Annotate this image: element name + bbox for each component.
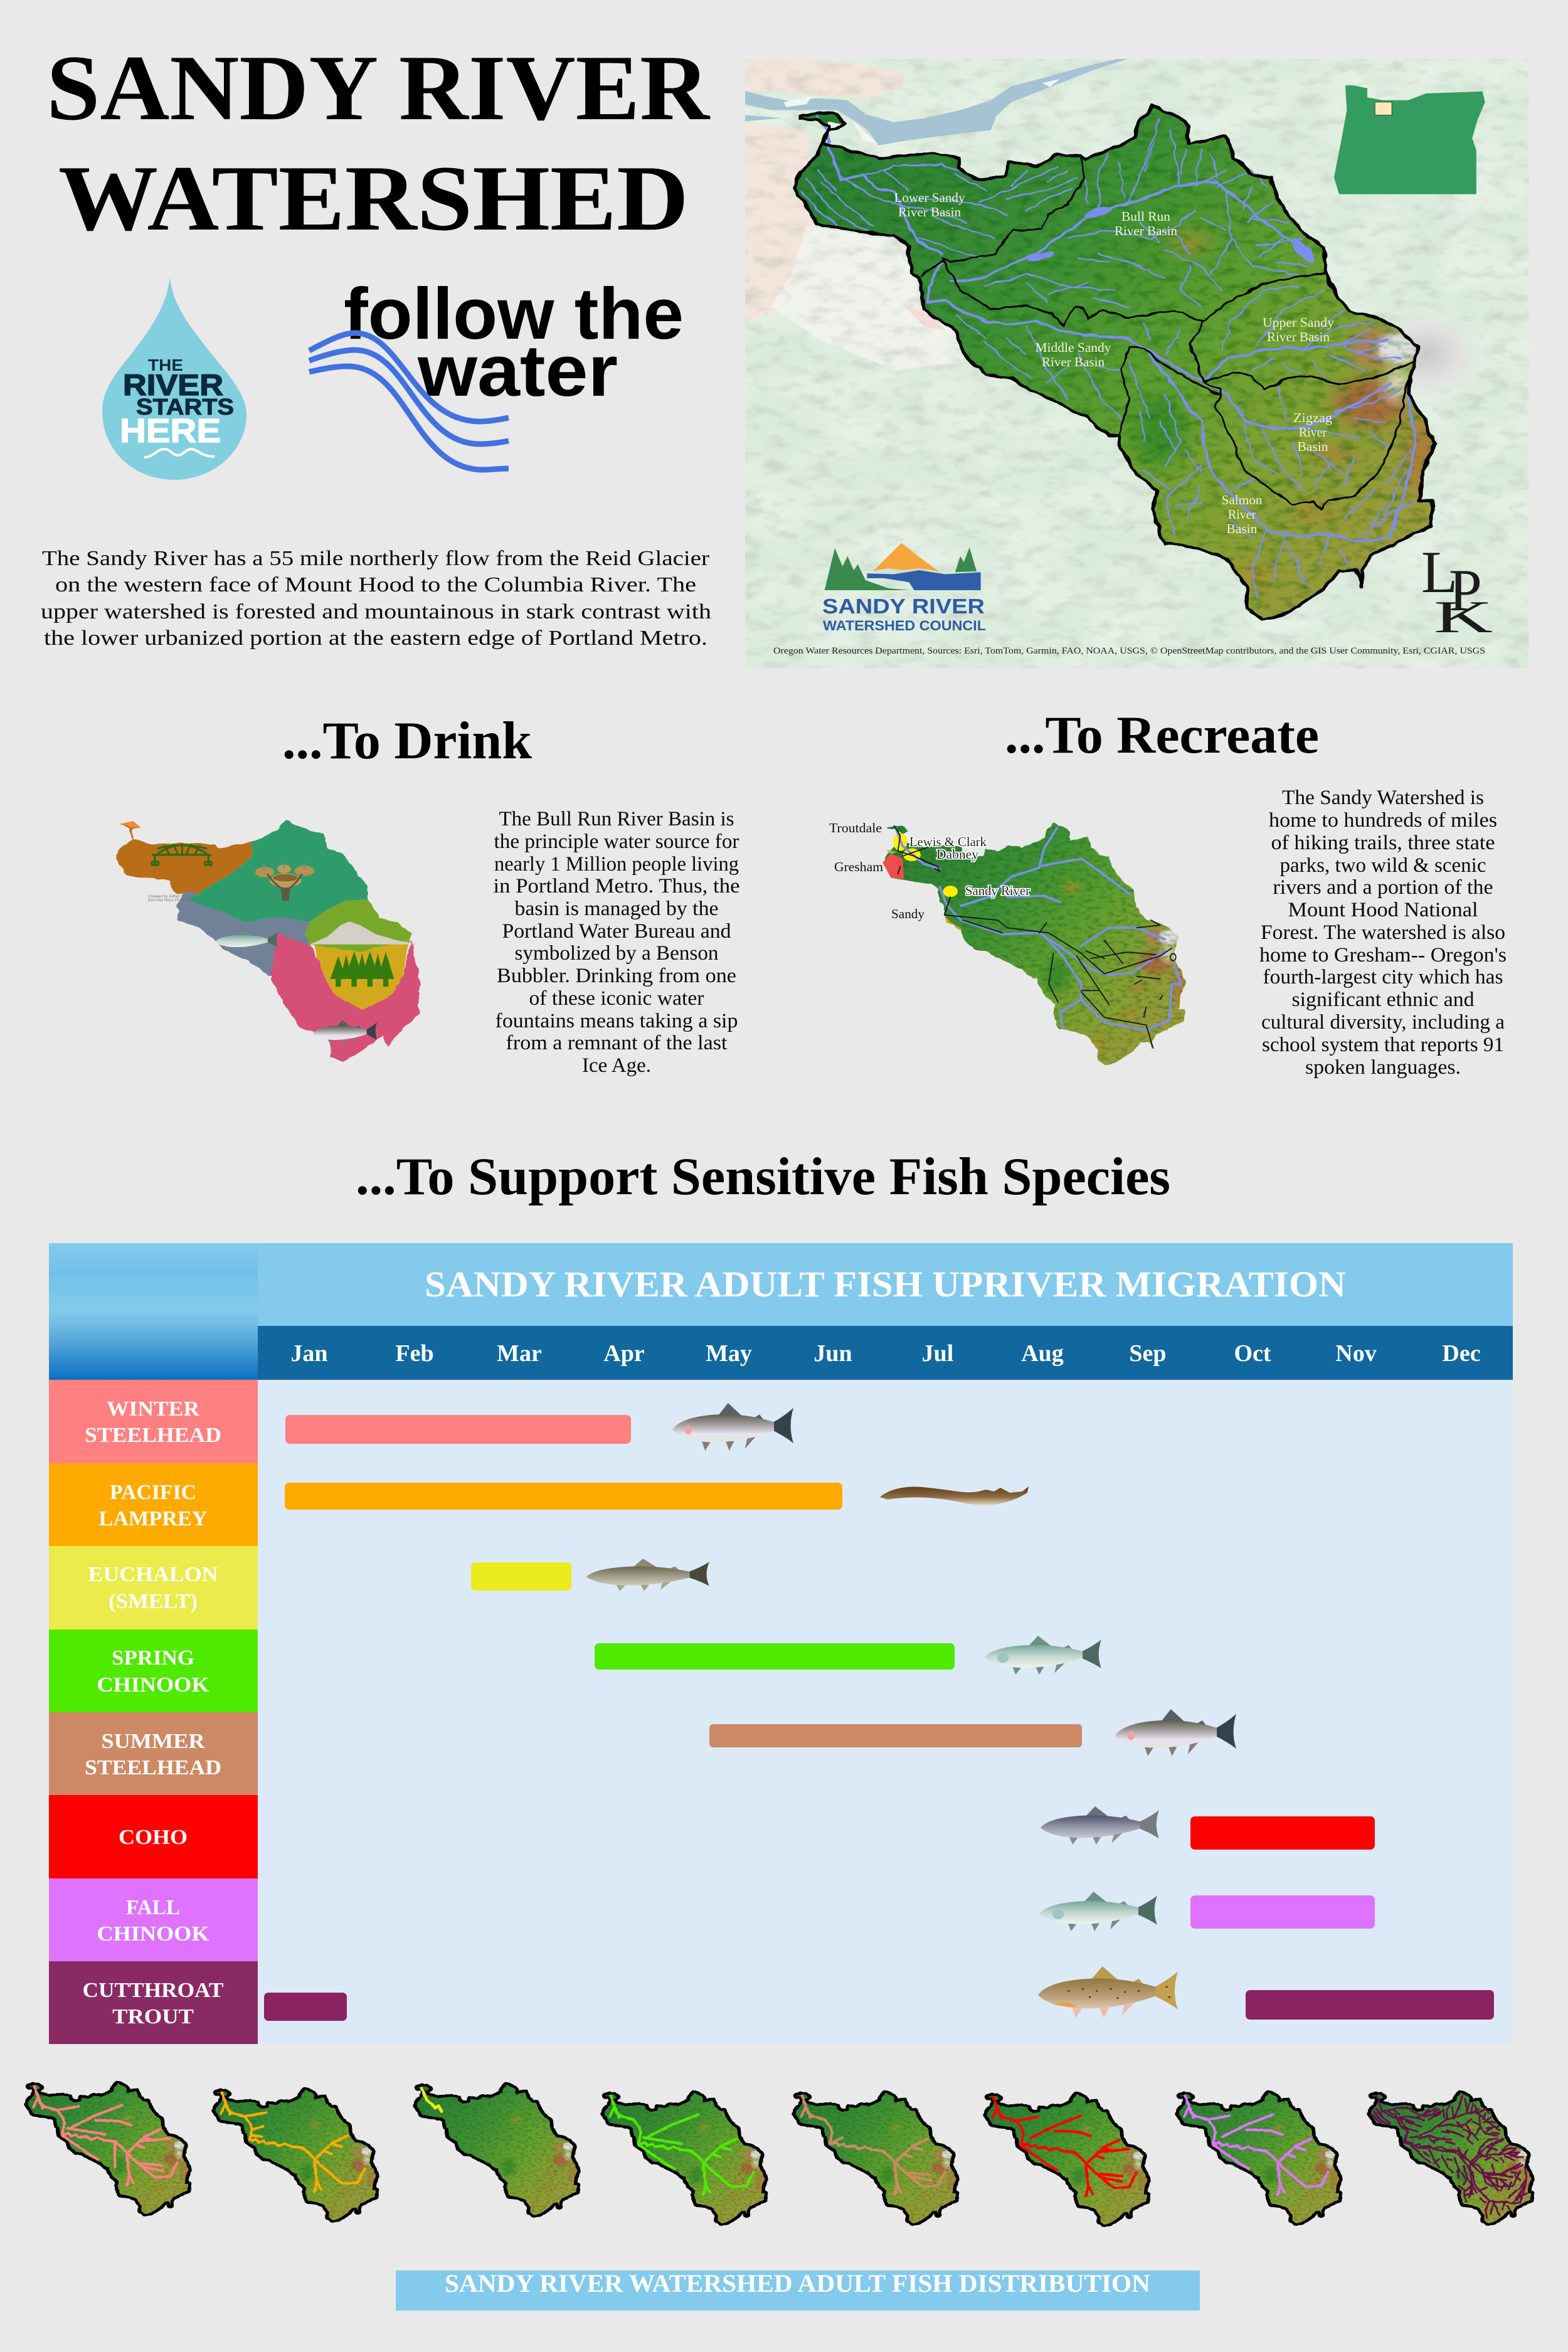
heading: to drink: ...To Drink: [282, 711, 532, 770]
icon: fir trees: [331, 951, 394, 987]
title: [46, 36, 710, 250]
icon: benson bubbler fountain: [255, 863, 314, 901]
icon: bridge: [152, 845, 211, 865]
row: cutthroat trout: [49, 1961, 1494, 2044]
basin labels: River: [1228, 507, 1256, 522]
drink paragraph: nearly 1 Million people living: [494, 853, 739, 876]
place labels: Sandy: [891, 906, 925, 921]
month band: Feb: [395, 1340, 434, 1367]
place labels: Gresham: [834, 859, 883, 874]
basin labels: River Basin: [1115, 223, 1177, 238]
logo: Sandy River Watershed Council: [822, 543, 986, 633]
caption: adult fish distribution: [396, 2269, 1200, 2311]
drink paragraph: [493, 808, 740, 1077]
recreate paragraph: cultural diversity, including a: [1261, 1011, 1505, 1034]
logo: LPK: K: [1434, 591, 1493, 642]
place labels: [829, 820, 1030, 921]
place labels: Lewis & Clark: [909, 834, 987, 849]
month band: Jul: [922, 1340, 953, 1367]
row: spring chinook: SPRING: [112, 1646, 194, 1670]
recreate paragraph: parks, two wild & scenic: [1279, 854, 1486, 877]
recreate paragraph: Forest. The watershed is also: [1261, 921, 1505, 944]
row: spring chinook: CHINOOK: [97, 1673, 209, 1697]
row: coho: [49, 1795, 1375, 1878]
map attribution: Oregon Water Resources Department, Sources: Esri, TomTom, Garmin, FAO, NOAA, USGS, © OpenStreetMap contributors, and the GIS User Community, Esri, CGIAR, USGS: [773, 646, 1485, 656]
intro paragraph: The Sandy River has a 55 mile northerly flow from the Reid Glacier: [42, 547, 710, 570]
drink paragraph: Ice Age.: [582, 1054, 651, 1077]
drink paragraph: Bubbler. Drinking from one: [497, 965, 736, 987]
panel: recreate map: [829, 820, 1189, 1066]
drink paragraph: symbolized by a Benson: [514, 942, 719, 965]
row: euchalon smelt: [49, 1546, 709, 1629]
noun project credit: [148, 894, 193, 903]
intro paragraph: the lower urbanized portion at the eastern edge of Portland Metro.: [44, 627, 707, 650]
panel: drink basin map: [116, 820, 420, 1062]
heading: to support sensitive fish species: ...To Support Sensitive Fish Species: [356, 1147, 1170, 1206]
logo: follow the water: [309, 273, 684, 470]
chart title band: SANDY RIVER ADULT FISH UPRIVER MIGRATION: [425, 1264, 1346, 1305]
distribution map: summer steelhead: [793, 2092, 958, 2224]
month band: Apr: [603, 1340, 645, 1367]
distribution map: cutthroat trout: [1369, 2092, 1533, 2224]
distribution map: coho: [985, 2093, 1149, 2225]
rivers, trails and parks: [882, 826, 1181, 1048]
drink paragraph: Portland Water Bureau and: [502, 920, 731, 943]
row: euchalon smelt: (SMELT): [109, 1590, 198, 1613]
logo: follow the water: water: [417, 330, 618, 411]
row: cutthroat trout: TROUT: [112, 2005, 194, 2028]
noun project credit: Created by Arthur Shlain: [148, 894, 193, 899]
recreate paragraph: school system that reports 91: [1262, 1034, 1504, 1056]
row: pacific lamprey: [49, 1463, 1029, 1546]
recreate paragraph: spoken languages.: [1305, 1056, 1461, 1079]
distribution map: pacific lamprey: [213, 2089, 378, 2221]
row: winter steelhead: STEELHEAD: [85, 1424, 221, 1447]
logo: Sandy River Watershed Council: SANDY RIVER: [822, 595, 985, 618]
panel: migration chart: [49, 1243, 1513, 2044]
corner gradient: [49, 1243, 258, 1380]
month band: Aug: [1021, 1340, 1064, 1367]
recreate paragraph: of hiking trails, three state: [1271, 832, 1495, 854]
caption: adult fish distribution: SANDY RIVER WATERSHED ADULT FISH DISTRIBUTION: [445, 2269, 1150, 2297]
intro paragraph: on the western face of Mount Hood to the Columbia River. The: [55, 573, 696, 596]
basin labels: Lower Sandy: [894, 190, 965, 205]
chart title band: [258, 1243, 1513, 1326]
recreate paragraph: home to hundreds of miles: [1269, 809, 1497, 832]
place labels: Dabney: [936, 847, 979, 862]
drink paragraph: fountains means taking a sip: [495, 1010, 738, 1032]
row: pacific lamprey: LAMPREY: [99, 1507, 207, 1530]
intro paragraph: upper watershed is forested and mountainous in stark contrast with: [41, 600, 711, 623]
basin labels: Zigzag: [1293, 410, 1333, 425]
month band: May: [706, 1340, 752, 1367]
basin labels: Upper Sandy: [1263, 315, 1335, 330]
icon: steelhead on drink map: [313, 1020, 377, 1044]
logo: LPK: [1421, 539, 1493, 642]
basin labels: River Basin: [1042, 354, 1104, 369]
logo: the river starts here drop: [102, 277, 246, 480]
row: euchalon smelt: EUCHALON: [88, 1563, 218, 1586]
basin labels: Salmon: [1222, 492, 1263, 507]
month band: Dec: [1442, 1340, 1481, 1367]
row: spring chinook: [49, 1629, 1101, 1712]
month band: Mar: [497, 1340, 542, 1367]
recreate paragraph: significant ethnic and: [1292, 988, 1475, 1011]
drink paragraph: The Bull Run River Basin is: [499, 808, 734, 830]
distribution map: winter steelhead: [26, 2082, 190, 2215]
month band: Jun: [813, 1340, 852, 1367]
basin labels: [894, 190, 1335, 536]
month band: [258, 1326, 1513, 1380]
row: summer steelhead: STEELHEAD: [85, 1756, 221, 1779]
basin labels: River Basin: [898, 204, 961, 220]
title: SANDY RIVER: [46, 36, 710, 140]
recreate paragraph: Mount Hood National: [1288, 899, 1478, 921]
row: cutthroat trout: CUTTHROAT: [83, 1979, 224, 2002]
recreate paragraph: The Sandy Watershed is: [1282, 787, 1484, 809]
month band: Nov: [1335, 1340, 1377, 1367]
heading: to recreate: ...To Recreate: [1005, 706, 1319, 765]
distribution map: fall chinook: [1177, 2092, 1341, 2224]
row: summer steelhead: [49, 1709, 1236, 1795]
row: coho: COHO: [119, 1826, 188, 1849]
chart body: [258, 1380, 1513, 2044]
logo: the river starts here drop: RIVER: [123, 368, 223, 401]
month band: Sep: [1129, 1340, 1167, 1367]
recreate paragraph: [1259, 787, 1507, 1079]
drink paragraph: from a remnant of the last: [506, 1032, 728, 1054]
basin labels: River Basin: [1267, 329, 1330, 344]
icon: mount hood: [310, 921, 420, 945]
basin labels: Basin: [1297, 439, 1328, 454]
basin labels: River: [1299, 425, 1327, 440]
drink paragraph: in Portland Metro. Thus, the: [493, 875, 740, 898]
recreate paragraph: rivers and a portion of the: [1273, 876, 1493, 899]
logo: the river starts here drop: HERE: [120, 412, 221, 450]
drink paragraph: basin is managed by the: [514, 898, 719, 920]
logo: the river starts here drop: STARTS: [136, 394, 234, 420]
row: winter steelhead: WINTER: [107, 1397, 199, 1421]
basin labels: Basin: [1227, 521, 1258, 536]
basin labels: Middle Sandy: [1035, 340, 1111, 355]
basin labels: Bull Run: [1121, 209, 1171, 224]
logo: LPK: L: [1421, 539, 1458, 605]
recreate paragraph: home to Gresham-- Oregon's: [1259, 944, 1507, 967]
logo: LPK: P: [1449, 557, 1482, 623]
row: summer steelhead: SUMMER: [102, 1730, 205, 1753]
month band: Jan: [290, 1340, 328, 1367]
watershed terrain and rivers: [786, 102, 1441, 622]
row: winter steelhead: [49, 1380, 793, 1463]
row: pacific lamprey: PACIFIC: [110, 1481, 196, 1504]
drink paragraph: the principle water source for: [494, 830, 739, 853]
distribution map: euchalon: [415, 2084, 579, 2216]
noun project credit: from the Noun Project: [148, 898, 188, 903]
colored basins: [116, 820, 420, 1062]
row: fall chinook: FALL: [126, 1896, 180, 1919]
panel: main watershed map: [745, 59, 1528, 668]
terrain base: [881, 821, 1189, 1066]
recreate paragraph: fourth-largest city which has: [1263, 966, 1503, 988]
month band: Oct: [1234, 1340, 1271, 1367]
place labels: Troutdale: [829, 820, 882, 835]
intro paragraph: [41, 547, 711, 650]
logo: Sandy River Watershed Council: WATERSHED COUNCIL: [823, 618, 986, 633]
row: fall chinook: [49, 1878, 1375, 1961]
logo: follow the water: follow the: [344, 273, 684, 354]
icon: chinook on drink map: [215, 930, 278, 951]
drink paragraph: of these iconic water: [529, 987, 704, 1010]
row: fall chinook: CHINOOK: [97, 1922, 209, 1946]
place labels: Sandy River: [965, 883, 1030, 898]
title: WATERSHED: [58, 147, 689, 250]
distribution map: spring chinook: [602, 2092, 766, 2224]
logo: the river starts here drop: THE: [148, 356, 183, 374]
map basemap: [745, 59, 1528, 668]
inset: Oregon locator: [1334, 85, 1485, 194]
